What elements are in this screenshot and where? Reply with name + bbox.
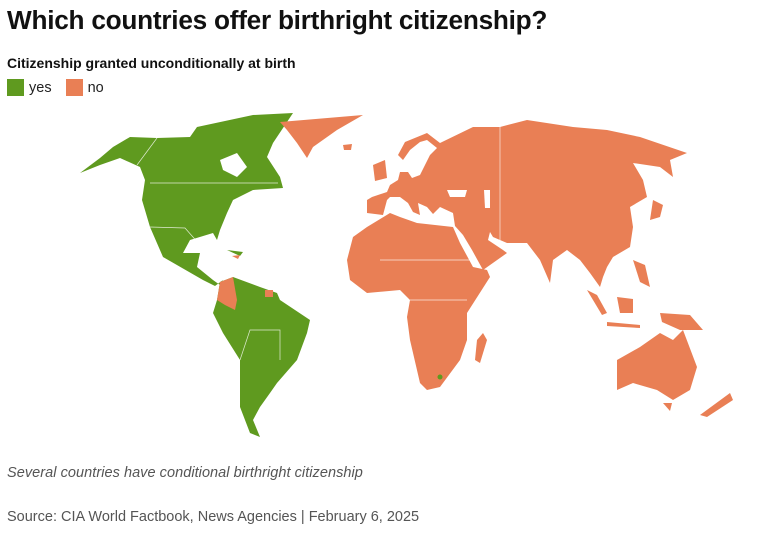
source: Source: CIA World Factbook, News Agencies | February 6, 2025 [7,509,419,525]
title: Which countries offer birthright citizenship? [7,5,547,35]
eurasia [367,120,687,287]
rest of world (no) [217,115,733,417]
icon: lesotho [438,374,442,380]
hudson bay [220,153,247,177]
legend: yes no [29,80,104,96]
africa [347,213,490,390]
americas (yes) [80,113,310,437]
note: Several countries have conditional birthright citizenship [7,465,363,481]
seas [447,190,467,197]
borders [137,125,500,360]
subtitle: Citizenship granted unconditionally at birth [7,55,296,71]
